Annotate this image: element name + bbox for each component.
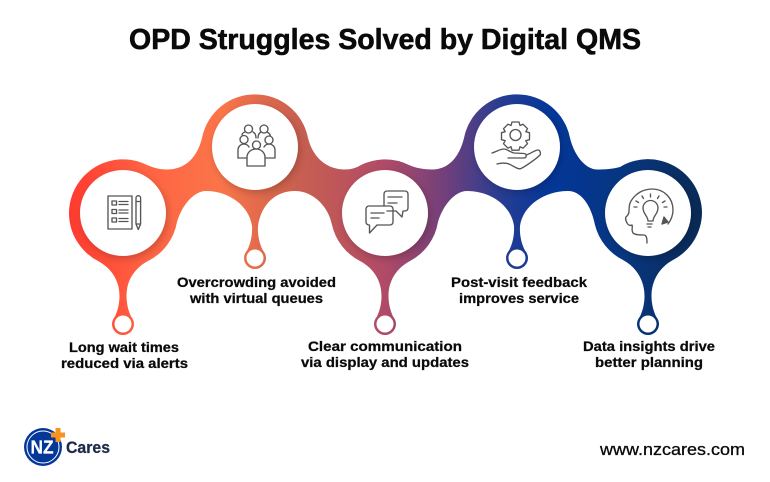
label: overcrowding: with virtual queues [189,291,323,306]
label: overcrowding: Overcrowding avoided [177,275,336,290]
logo: NZ Cares: Cares [66,439,110,457]
label: clear communication: via display and updates [301,355,469,370]
icon: crowd of people [238,125,275,166]
logo: NZ Cares: NZ [30,438,54,458]
title: OPD Struggles Solved by Digital QMS [129,24,641,56]
icon: checklist and pencil [108,196,141,230]
label: long wait times: reduced via alerts [61,356,188,371]
label: post-visit feedback: Post-visit feedback [451,275,588,290]
label: data insights [583,339,716,370]
label: data insights: Data insights drive [583,339,716,354]
label: data insights: better planning [595,355,703,370]
logo: NZ Cares [24,428,110,466]
connected five-node ribbon [69,94,702,335]
icon: gear over open hand [492,122,540,169]
label: long wait times: Long wait times [69,340,179,355]
label: overcrowding [177,275,336,306]
label: clear communication [301,339,469,370]
label: post-visit feedback [451,275,588,306]
icon: head with lightbulb [626,189,673,243]
icon: speech bubbles [366,191,408,233]
label: clear communication: Clear communication [308,339,462,354]
label: post-visit feedback: improves service [459,291,580,306]
website address: www.nzcares.com [599,441,745,459]
label: long wait times [61,340,188,371]
